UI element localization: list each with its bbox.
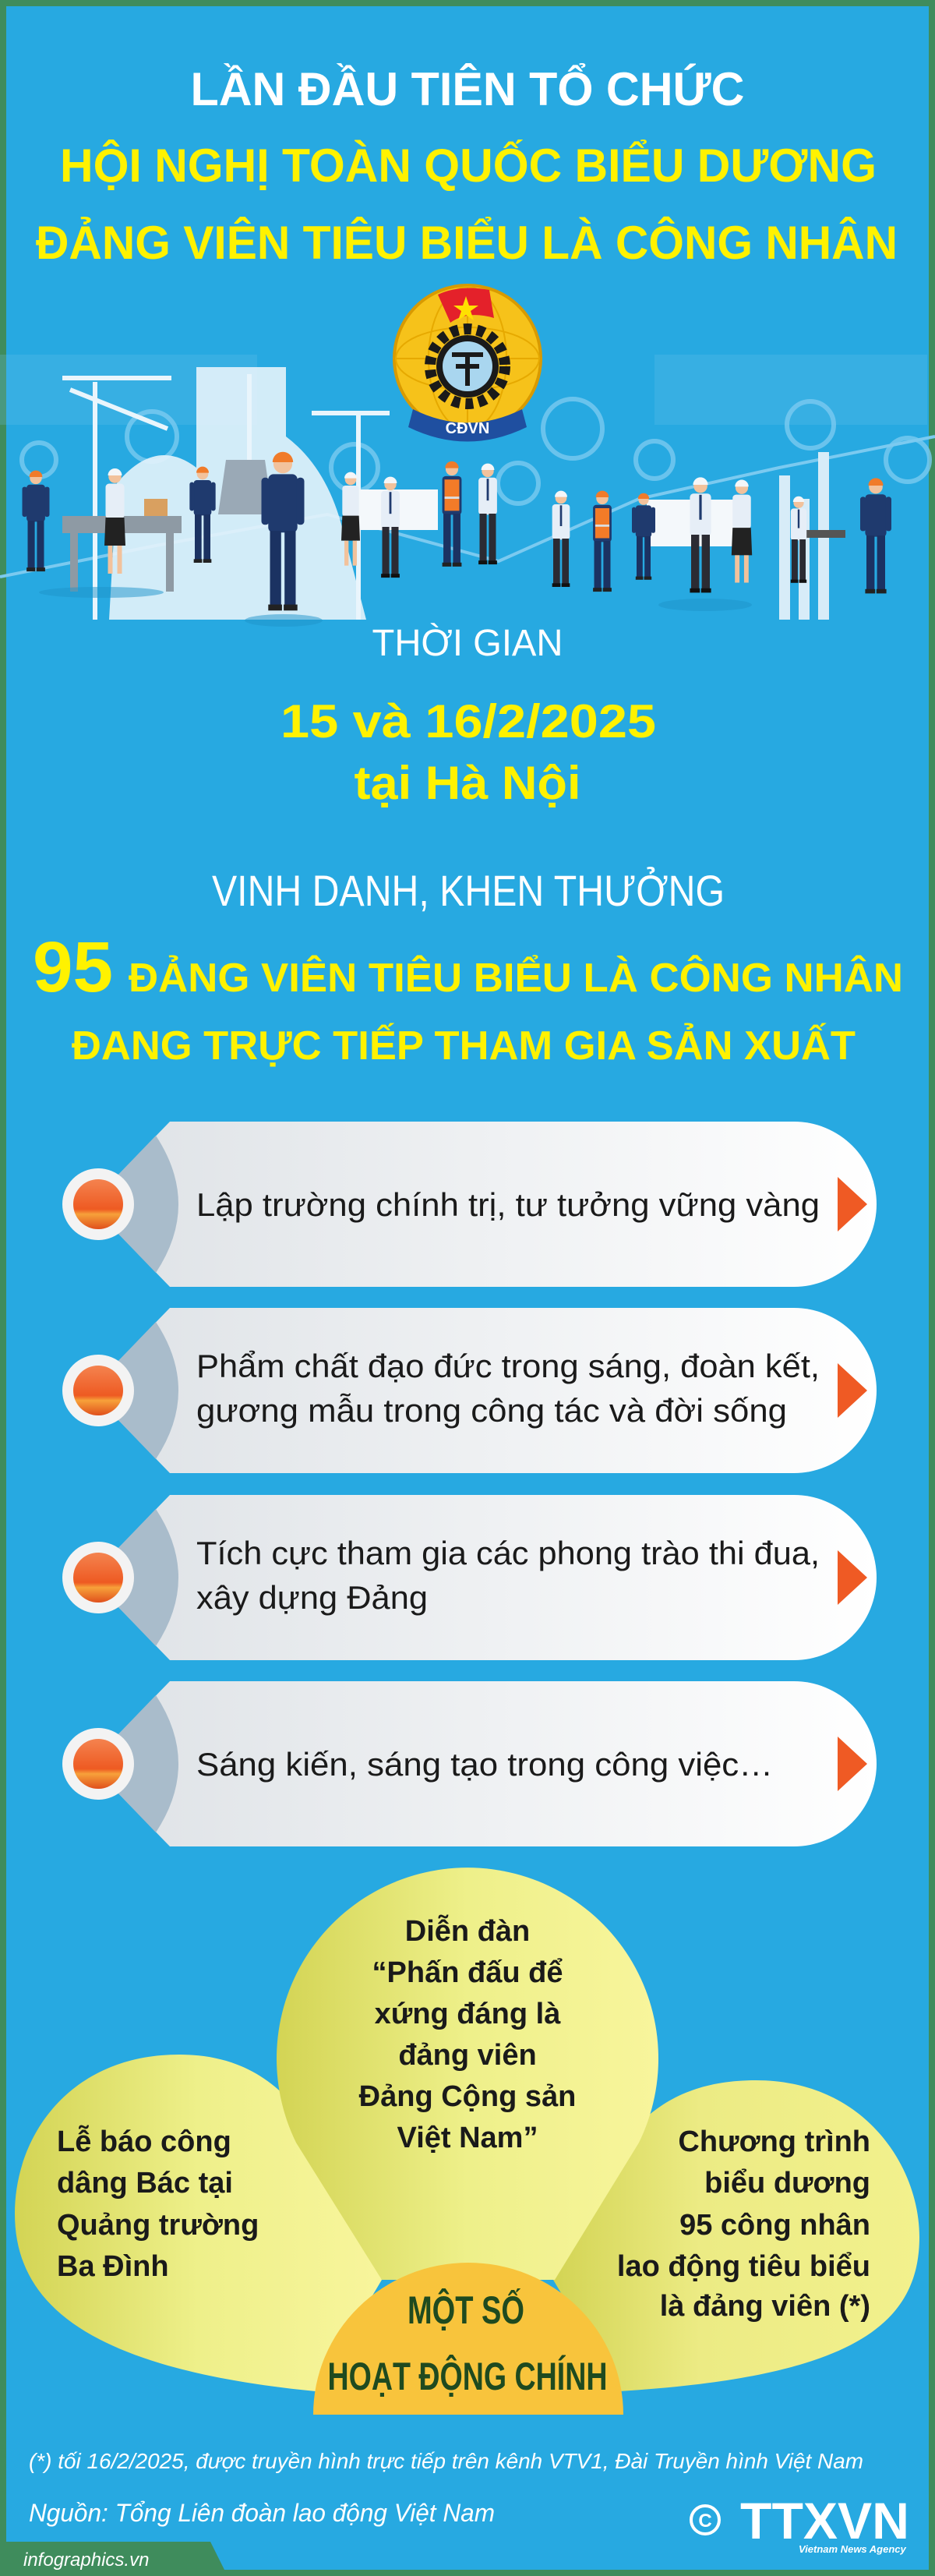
ribbon [408,409,527,441]
website tab: infographics.vn [23,2549,149,2571]
people [22,471,50,571]
activities flower [15,1868,919,2415]
criterion 3: xây dựng Đảng [196,1579,428,1616]
petal: left [15,2055,382,2391]
petal: left: Quảng trường [57,2209,259,2242]
honorees headline: ĐẢNG VIÊN TIÊU BIỂU LÀ CÔNG NHÂN [129,955,903,1001]
gear [430,329,505,404]
petal: middle: “Phấn đấu để [372,1956,563,1989]
petal: middle [277,1868,658,2280]
gears background [22,399,930,504]
petal: right: lao động tiêu biểu [617,2250,870,2283]
criterion 1: Lập trường chính trị, tư tưởng vững vàng [196,1186,820,1223]
blueprints [358,489,438,530]
hook load [218,460,273,514]
logo: CĐVN emblem [394,285,541,441]
center dome label [313,2263,623,2415]
petal: left: Lễ báo công [57,2124,231,2158]
honor heading: VINH DANH, KHEN THƯỞNG [212,866,725,915]
criterion 3: Tích cực tham gia các phong trào thi đua, [196,1535,820,1571]
petal: right: biểu dương [704,2167,870,2200]
honorees headline: 95 [33,928,113,1007]
petal: middle: Đảng Cộng sản [359,2080,576,2113]
petal: middle: đảng viên [398,2039,537,2072]
TTXVN logo: C [698,2511,712,2532]
TTXVN logo: Vietnam News Agency [799,2543,907,2555]
date and place: tại Hà Nội [354,757,581,809]
criterion 1 [62,1122,877,1287]
footnote: (*) tối 16/2/2025, được truyền hình trực tiếp trên kênh VTV1, Đài Truyền hình Việt Nam [29,2449,863,2473]
source: Nguồn: Tổng Liên đoàn lao động Việt Nam [29,2499,495,2527]
dotted map hint [0,355,927,425]
TTXVN logo: TTXVN [740,2492,909,2549]
date and place [280,695,656,809]
chart lines [0,436,935,577]
petal: right: 95 công nhân [679,2209,870,2242]
honorees headline: ĐANG TRỰC TIẾP THAM GIA SẢN XUẤT [72,1023,856,1069]
cranes [62,374,390,620]
title: LẦN ĐẦU TIÊN TỔ CHỨC [190,63,745,115]
petal: left: Ba Đình [57,2250,169,2283]
ground shadows [39,587,752,627]
center dome label: HOẠT ĐỘNG CHÍNH [327,2354,608,2398]
criterion 3 [62,1495,877,1660]
center dome label: MỘT SỐ [408,2288,524,2332]
website tab [0,2542,228,2576]
petal: right: Chương trình [678,2125,870,2158]
petal: middle: xứng đáng là [375,1998,561,2030]
flag [438,288,494,323]
criterion 2: gương mẫu trong công tác và đời sống [196,1392,787,1429]
petal: right: là đảng viên (*) [660,2290,870,2323]
title: HỘI NGHỊ TOÀN QUỐC BIỂU DƯƠNG [60,140,877,192]
petal: middle: Việt Nam” [397,2122,538,2154]
criterion 4 [62,1681,877,1846]
buildings [109,367,366,620]
criterion 2 [62,1308,877,1473]
petal: left: dâng Bác tại [57,2167,233,2200]
title [36,63,898,269]
criterion 2: Phẩm chất đạo đức trong sáng, đoàn kết, [196,1348,820,1384]
desk [795,530,845,538]
honorees headline [33,928,903,1069]
time heading: THỜI GIAN [372,622,563,664]
logo: CĐVN emblem: CĐVN [446,420,489,437]
date and place: 15 và 16/2/2025 [280,695,656,747]
title: ĐẢNG VIÊN TIÊU BIỂU LÀ CÔNG NHÂN [36,217,898,269]
petal: right [553,2080,919,2391]
conveyor table [62,499,182,592]
criterion 4: Sáng kiến, sáng tạo trong công việc… [196,1746,773,1783]
petal: middle: Diễn đàn [405,1913,530,1948]
illustration: workers scene [0,355,935,627]
